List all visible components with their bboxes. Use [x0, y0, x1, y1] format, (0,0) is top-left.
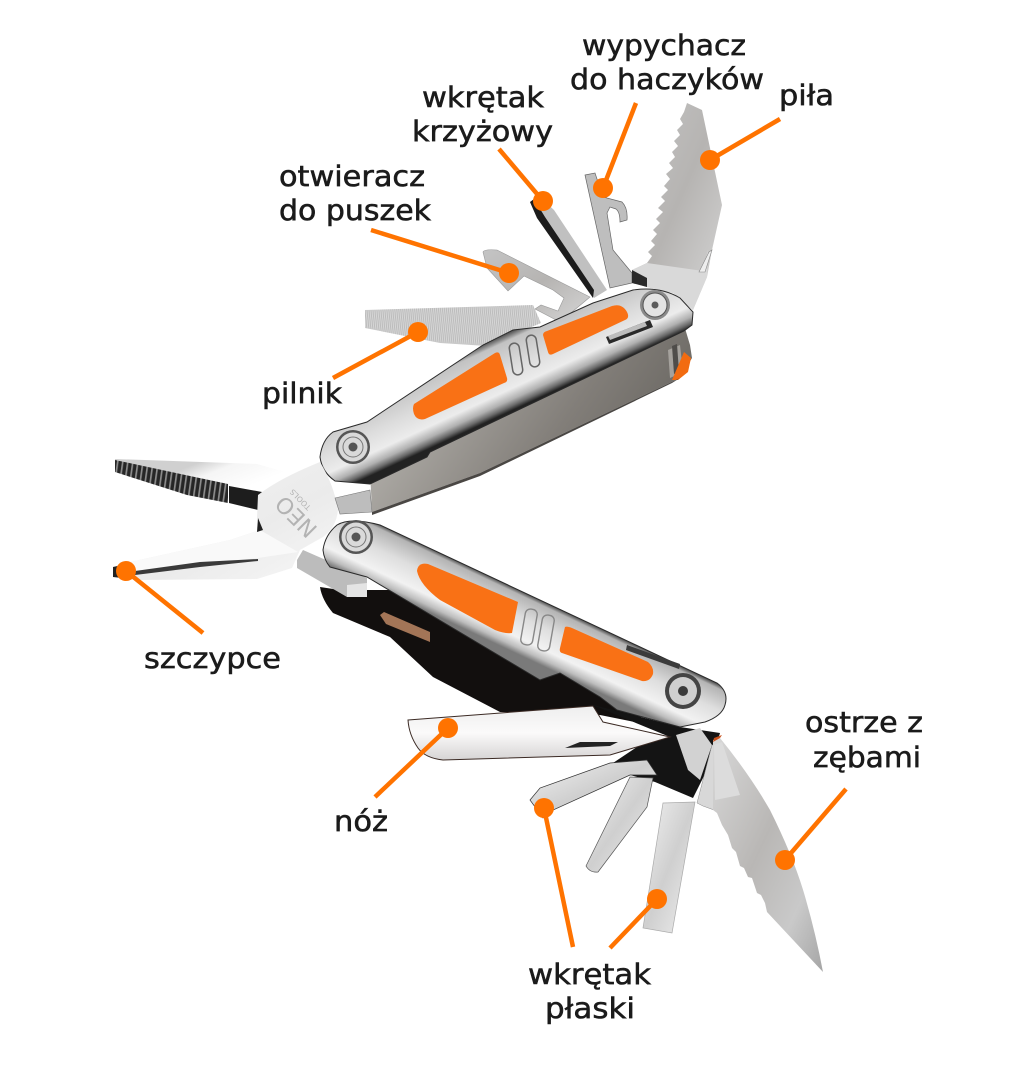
- side body of upper handle: [370, 325, 692, 515]
- label: wypychacz do haczyków: do haczyków: [570, 63, 764, 96]
- file blade: [365, 305, 541, 346]
- orange grip 4: [560, 627, 653, 681]
- leader: szczypce: [116, 561, 203, 633]
- serrated knife blade: [713, 735, 823, 972]
- orange grip 2: [543, 305, 628, 355]
- leader: wkrętak płaski, left: [534, 798, 573, 947]
- flat screwdriver, right: [643, 802, 695, 933]
- label: wkrętak płaski: płaski: [545, 992, 635, 1025]
- leader: wkrętak krzyżowy: [499, 149, 553, 211]
- label: wypychacz do haczyków: wypychacz: [582, 29, 746, 62]
- label: wkrętak płaski: [528, 958, 652, 1025]
- brand text NEO TOOLS: NEO: [271, 490, 323, 542]
- small blade behind serrated knife: [697, 745, 716, 810]
- label: ostrze z zębami: [805, 706, 923, 774]
- label: nóż: nóż: [334, 805, 388, 838]
- label: ostrze z zębami: ostrze z: [805, 706, 923, 739]
- leader: ostrze z zębami: [775, 789, 846, 870]
- label: otwieracz do puszek: otwieracz: [279, 160, 425, 193]
- brand text NEO TOOLS: TOOLS: [288, 487, 314, 513]
- tool: multitool photo illustration: [113, 103, 823, 972]
- labels: [144, 29, 923, 1025]
- leader: piła: [700, 119, 780, 170]
- lower slider: [626, 645, 680, 669]
- label: piła: piła: [779, 79, 834, 112]
- label: wypychacz do haczyków: [570, 29, 764, 96]
- upper handle: [320, 289, 693, 484]
- upper block between handles: [335, 490, 372, 514]
- pliers lower block: [297, 550, 367, 597]
- knife blade: [408, 706, 670, 760]
- dark underside of lower handle: [320, 587, 650, 725]
- label: wkrętak krzyżowy: [412, 81, 553, 148]
- pivot screw top right: [640, 290, 670, 320]
- orange grip 3: [417, 564, 518, 633]
- leader: nóż: [375, 718, 458, 797]
- pivot screw left: [339, 520, 373, 554]
- pivot screw right: [665, 673, 701, 709]
- ridged slider: [606, 320, 653, 344]
- lower pliers jaw and head: [113, 462, 338, 580]
- label: wkrętak krzyżowy: krzyżowy: [412, 115, 553, 148]
- leader: wypychacz do haczyków: [593, 103, 636, 198]
- leader: otwieracz do puszek: [371, 230, 519, 283]
- leader lines and dots: [116, 103, 846, 948]
- hub at lower blades: [590, 704, 720, 798]
- pivot screw bottom left: [336, 430, 370, 464]
- leader: pilnik: [333, 322, 428, 378]
- label: otwieracz do puszek: [279, 160, 432, 227]
- label: pilnik: pilnik: [262, 377, 343, 410]
- Phillips screwdriver: [530, 197, 607, 298]
- saw blade: [632, 103, 722, 310]
- upper pliers jaw: [115, 459, 292, 510]
- leader: wkrętak płaski, right: [610, 889, 667, 948]
- flat screwdriver small, left: [530, 760, 657, 818]
- screwdriver blade, middle: [586, 777, 653, 872]
- can opener: [483, 250, 590, 322]
- orange grip 1: [413, 352, 507, 419]
- grip slots: [509, 334, 540, 376]
- lower handle: [323, 520, 726, 727]
- hook pusher: [585, 173, 632, 288]
- jaw teeth: [115, 460, 228, 503]
- label: wkrętak płaski: wkrętak: [528, 958, 652, 991]
- label: ostrze z zębami: zębami: [813, 741, 921, 774]
- lower grip slots: [520, 608, 555, 652]
- label: wkrętak krzyżowy: wkrętak: [422, 81, 545, 114]
- label: otwieracz do puszek: do puszek: [279, 194, 432, 227]
- label: szczypce: szczypce: [144, 642, 281, 675]
